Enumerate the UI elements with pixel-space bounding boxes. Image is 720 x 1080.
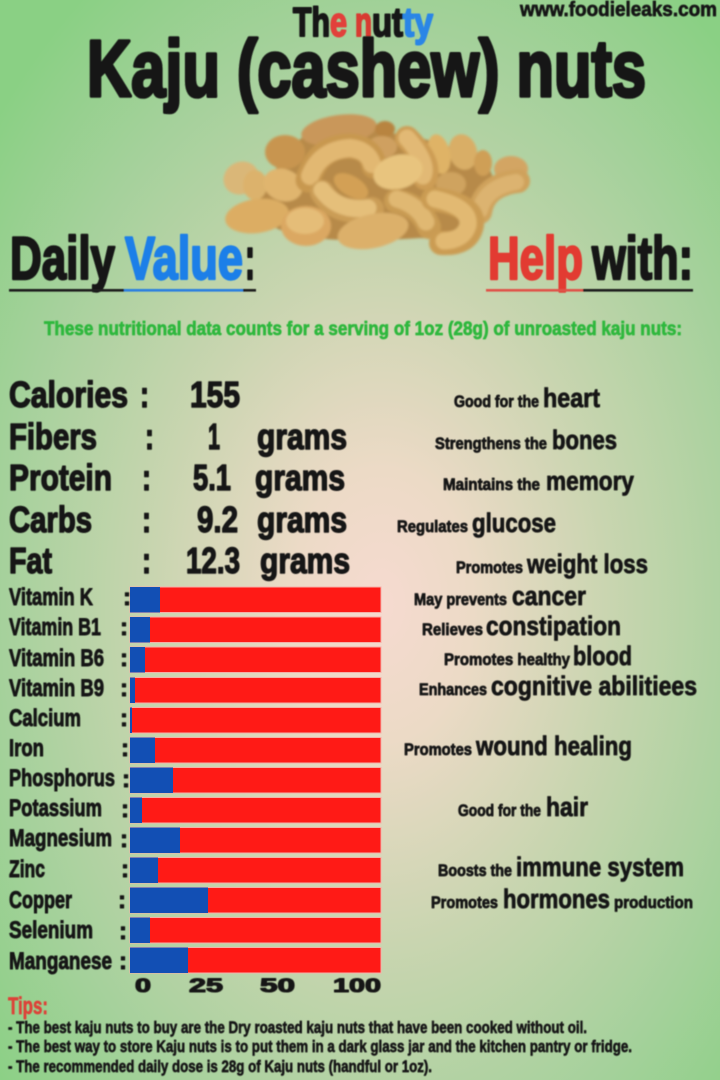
bar labels: : — [119, 918, 127, 945]
bar labels: : — [120, 645, 128, 672]
bar labels: Vitamin B1 — [9, 614, 101, 641]
macronutrient table: Protein — [9, 457, 112, 498]
benefit: cancer: cancer — [512, 581, 586, 611]
heading: Daily Value — [9, 225, 256, 292]
bar labels: : — [119, 948, 127, 975]
macronutrient table: 1 — [208, 416, 220, 457]
bar labels: Copper — [9, 887, 72, 914]
benefit: cancer — [414, 581, 586, 611]
heading: Daily Value: : — [245, 225, 255, 292]
benefit: hormones: production — [614, 893, 693, 912]
heading: Daily Value: Value — [125, 225, 243, 292]
bar tracks — [130, 587, 381, 973]
tips — [8, 993, 632, 1076]
benefit: hormones: Promotes — [431, 893, 498, 912]
benefits list — [397, 383, 697, 914]
benefit: weight loss — [456, 549, 648, 579]
macronutrient table: 9.2 — [197, 499, 238, 540]
bar labels: Phosphorus — [9, 765, 115, 792]
benefit: memory: Maintains the — [443, 475, 540, 494]
benefit: hair — [458, 792, 588, 822]
benefit: wound healing: Promotes — [404, 740, 472, 759]
bar labels: Potassium — [9, 795, 102, 822]
heading: Help with: Help — [488, 225, 583, 292]
benefit: heart: heart — [543, 383, 600, 413]
macronutrient table: : — [140, 374, 149, 415]
bar labels: Vitamin B6 — [9, 645, 104, 672]
bar labels: Vitamin B9 — [9, 675, 104, 702]
benefit: cognitive abilities — [419, 671, 697, 701]
macronutrient table: 155 — [190, 374, 240, 415]
bar chart axis: 50 — [260, 976, 295, 997]
benefit: wound healing: wound healing — [475, 731, 632, 761]
bar labels: : — [121, 796, 129, 823]
benefit: hair: Good for the — [458, 801, 541, 820]
bar chart axis — [135, 976, 381, 997]
benefit: immune system — [438, 852, 684, 882]
bar values — [130, 587, 208, 973]
tip 3: - The recommended daily dose is 28g of Kaju nuts (handful or 1oz). — [8, 1057, 432, 1076]
bar labels: Magnesium — [9, 825, 112, 852]
bar chart axis: 25 — [189, 976, 224, 997]
macronutrient table: : — [142, 499, 151, 540]
small heading: The nutty: Th — [293, 0, 330, 45]
benefit: hormones: hormones — [503, 884, 610, 914]
benefit: blood: Promotes healthy — [444, 650, 570, 669]
illustration: pile of cashew nuts — [217, 110, 528, 255]
macronutrient table: Fat — [9, 540, 52, 581]
bar labels: Zinc — [9, 856, 45, 883]
bar labels: : — [123, 584, 131, 611]
bar chart axis: 100 — [333, 976, 381, 997]
benefit: hormones — [431, 884, 693, 914]
benefit: glucose — [397, 508, 556, 538]
benefit: weight loss: weight loss — [526, 549, 648, 579]
bar labels: : — [121, 856, 129, 883]
benefit: hair: hair — [546, 792, 588, 822]
tips heading: Tips: — [8, 993, 48, 1020]
benefit: glucose: Regulates — [397, 517, 468, 536]
bar labels — [9, 584, 131, 975]
benefit: memory: memory — [546, 466, 634, 496]
benefit: constipation — [422, 611, 621, 641]
benefit: wound healing — [404, 731, 632, 761]
benefit: cancer: May prevents — [414, 590, 507, 609]
macronutrient table: grams — [257, 416, 347, 457]
small heading: The nutty — [293, 0, 433, 45]
benefit: blood — [444, 641, 632, 671]
small heading: The nutty: n — [355, 0, 372, 45]
benefit: bones: bones — [552, 425, 617, 455]
macronutrient table: : — [145, 416, 154, 457]
macronutrient table: 5.1 — [193, 457, 231, 498]
bar chart axis: 0 — [135, 976, 151, 997]
heading: Help with — [486, 225, 693, 292]
benefit: heart — [454, 383, 600, 413]
benefit: immune system: Boosts the — [438, 861, 512, 880]
macronutrient table: grams — [257, 499, 347, 540]
bar labels: : — [120, 614, 128, 641]
bar chart: vitamins and minerals daily value — [9, 584, 381, 997]
bar labels: : — [118, 887, 126, 914]
benefit: cognitive abilities: Enhances — [419, 680, 487, 699]
benefit: bones: Strengthens the — [435, 434, 547, 453]
benefit: constipation: constipation — [486, 611, 621, 641]
benefit: immune system: immune system — [516, 852, 684, 882]
small heading: The nutty: ty — [403, 0, 433, 45]
benefit: bones — [435, 425, 617, 455]
macronutrient table: 12.3 — [186, 540, 240, 581]
bar labels: Calcium — [9, 705, 81, 732]
benefit: memory — [443, 466, 634, 496]
bar labels: : — [120, 675, 128, 702]
small heading: The nutty: ut — [372, 0, 403, 45]
benefit: blood: blood — [573, 641, 632, 671]
small heading: The nutty: e — [330, 0, 347, 45]
bar labels: Vitamin K — [9, 584, 94, 611]
benefit: weight loss: Promotes — [456, 558, 523, 577]
bar labels: : — [120, 826, 128, 853]
benefit: heart: Good for the — [454, 392, 539, 411]
macronutrient table: Carbs — [9, 499, 92, 540]
macronutrient table: grams — [260, 540, 350, 581]
macronutrient table: : — [142, 540, 151, 581]
bar labels: : — [121, 735, 129, 762]
bar labels: Selenium — [9, 917, 93, 944]
bar labels: Manganese — [9, 948, 112, 975]
heading: Daily Value: Daily — [10, 225, 115, 292]
bar labels: : — [120, 705, 128, 732]
benefit: constipation: Relieves — [422, 620, 483, 639]
macronutrient table — [9, 374, 350, 581]
bar labels: Iron — [9, 735, 44, 762]
macronutrient table: Fibers — [9, 416, 97, 457]
macronutrient table: Calories — [9, 374, 128, 415]
benefit: glucose: glucose — [472, 508, 556, 538]
macronutrient table: : — [142, 457, 151, 498]
macronutrient table: grams — [255, 457, 345, 498]
bar labels: : — [122, 766, 130, 793]
